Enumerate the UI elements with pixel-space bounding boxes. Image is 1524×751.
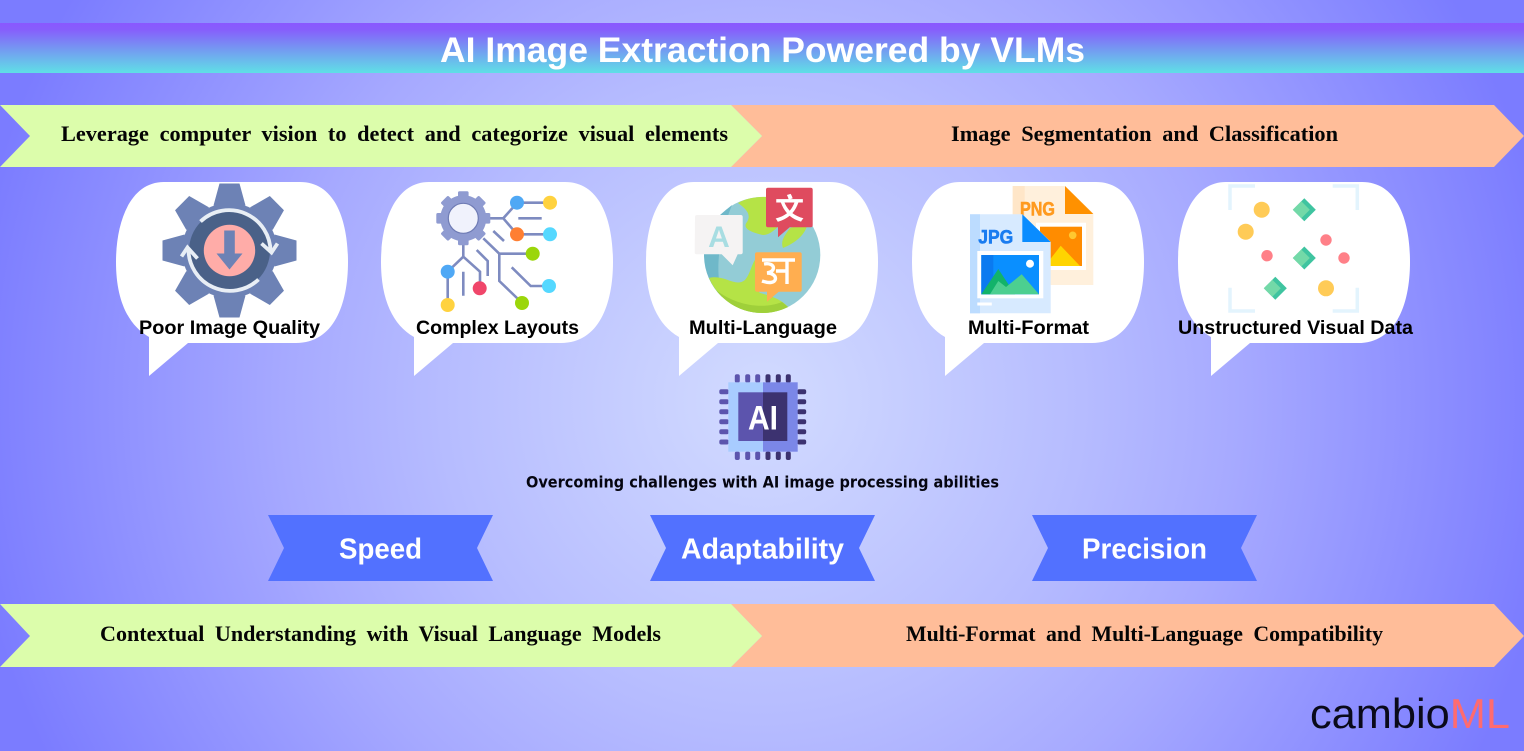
icon: globe with speech bubbles: 文: [775, 193, 804, 226]
icon: globe with speech bubbles: A: [708, 221, 730, 254]
icon: globe with speech bubbles: [695, 188, 820, 313]
title banner: AI Image Extraction Powered by VLMs: [440, 31, 1085, 70]
top arrow band: [0, 105, 1524, 167]
title banner: [0, 23, 1524, 73]
icon: PNG and JPG files: [970, 186, 1093, 313]
label: Multi-Language: [689, 317, 837, 339]
label: Multi-Format: [968, 317, 1090, 339]
bottom arrow band: Contextual Understanding with Visual Language Models: [100, 621, 661, 646]
label: Unstructured Visual Data: [1178, 317, 1413, 339]
ribbon: adaptability: [650, 515, 875, 581]
top arrow band: Leverage computer vision to detect and categorize visual elements: [61, 121, 728, 146]
icon: gear with down arrow: [162, 184, 296, 318]
ribbon: speed: Speed: [339, 534, 422, 566]
icon: AI chip: AI: [748, 399, 778, 437]
bottom arrow band: Multi-Format and Multi-Language Compatibility: [906, 621, 1383, 646]
panel: multi-format: [912, 182, 1144, 376]
icon: PNG and JPG files: PNG: [1020, 199, 1055, 221]
panel: unstructured visual data: [1178, 182, 1413, 376]
top arrow band: Image Segmentation and Classification: [951, 121, 1338, 146]
ribbon: adaptability: Adaptability: [681, 534, 844, 566]
ribbon: precision: [1032, 515, 1257, 581]
label: Complex Layouts: [416, 317, 579, 339]
icon: circuit gear network: [436, 191, 557, 312]
icon: PNG and JPG files: JPG: [978, 226, 1013, 248]
panel: multi-language: [646, 182, 878, 376]
panel: poor image quality: [116, 182, 348, 376]
logo: cambioML: cambioML: [1310, 690, 1510, 737]
ribbon: speed: [268, 515, 493, 581]
ribbon: precision: Precision: [1082, 534, 1207, 566]
panel: complex layouts: [381, 182, 613, 376]
label: Poor Image Quality: [139, 317, 320, 339]
icon: scattered shapes in scan frame: [1230, 186, 1357, 311]
caption: Overcoming challenges with AI image processing abilities: [526, 472, 999, 492]
bottom arrow band: [0, 604, 1524, 667]
icon: AI chip: [719, 374, 806, 460]
